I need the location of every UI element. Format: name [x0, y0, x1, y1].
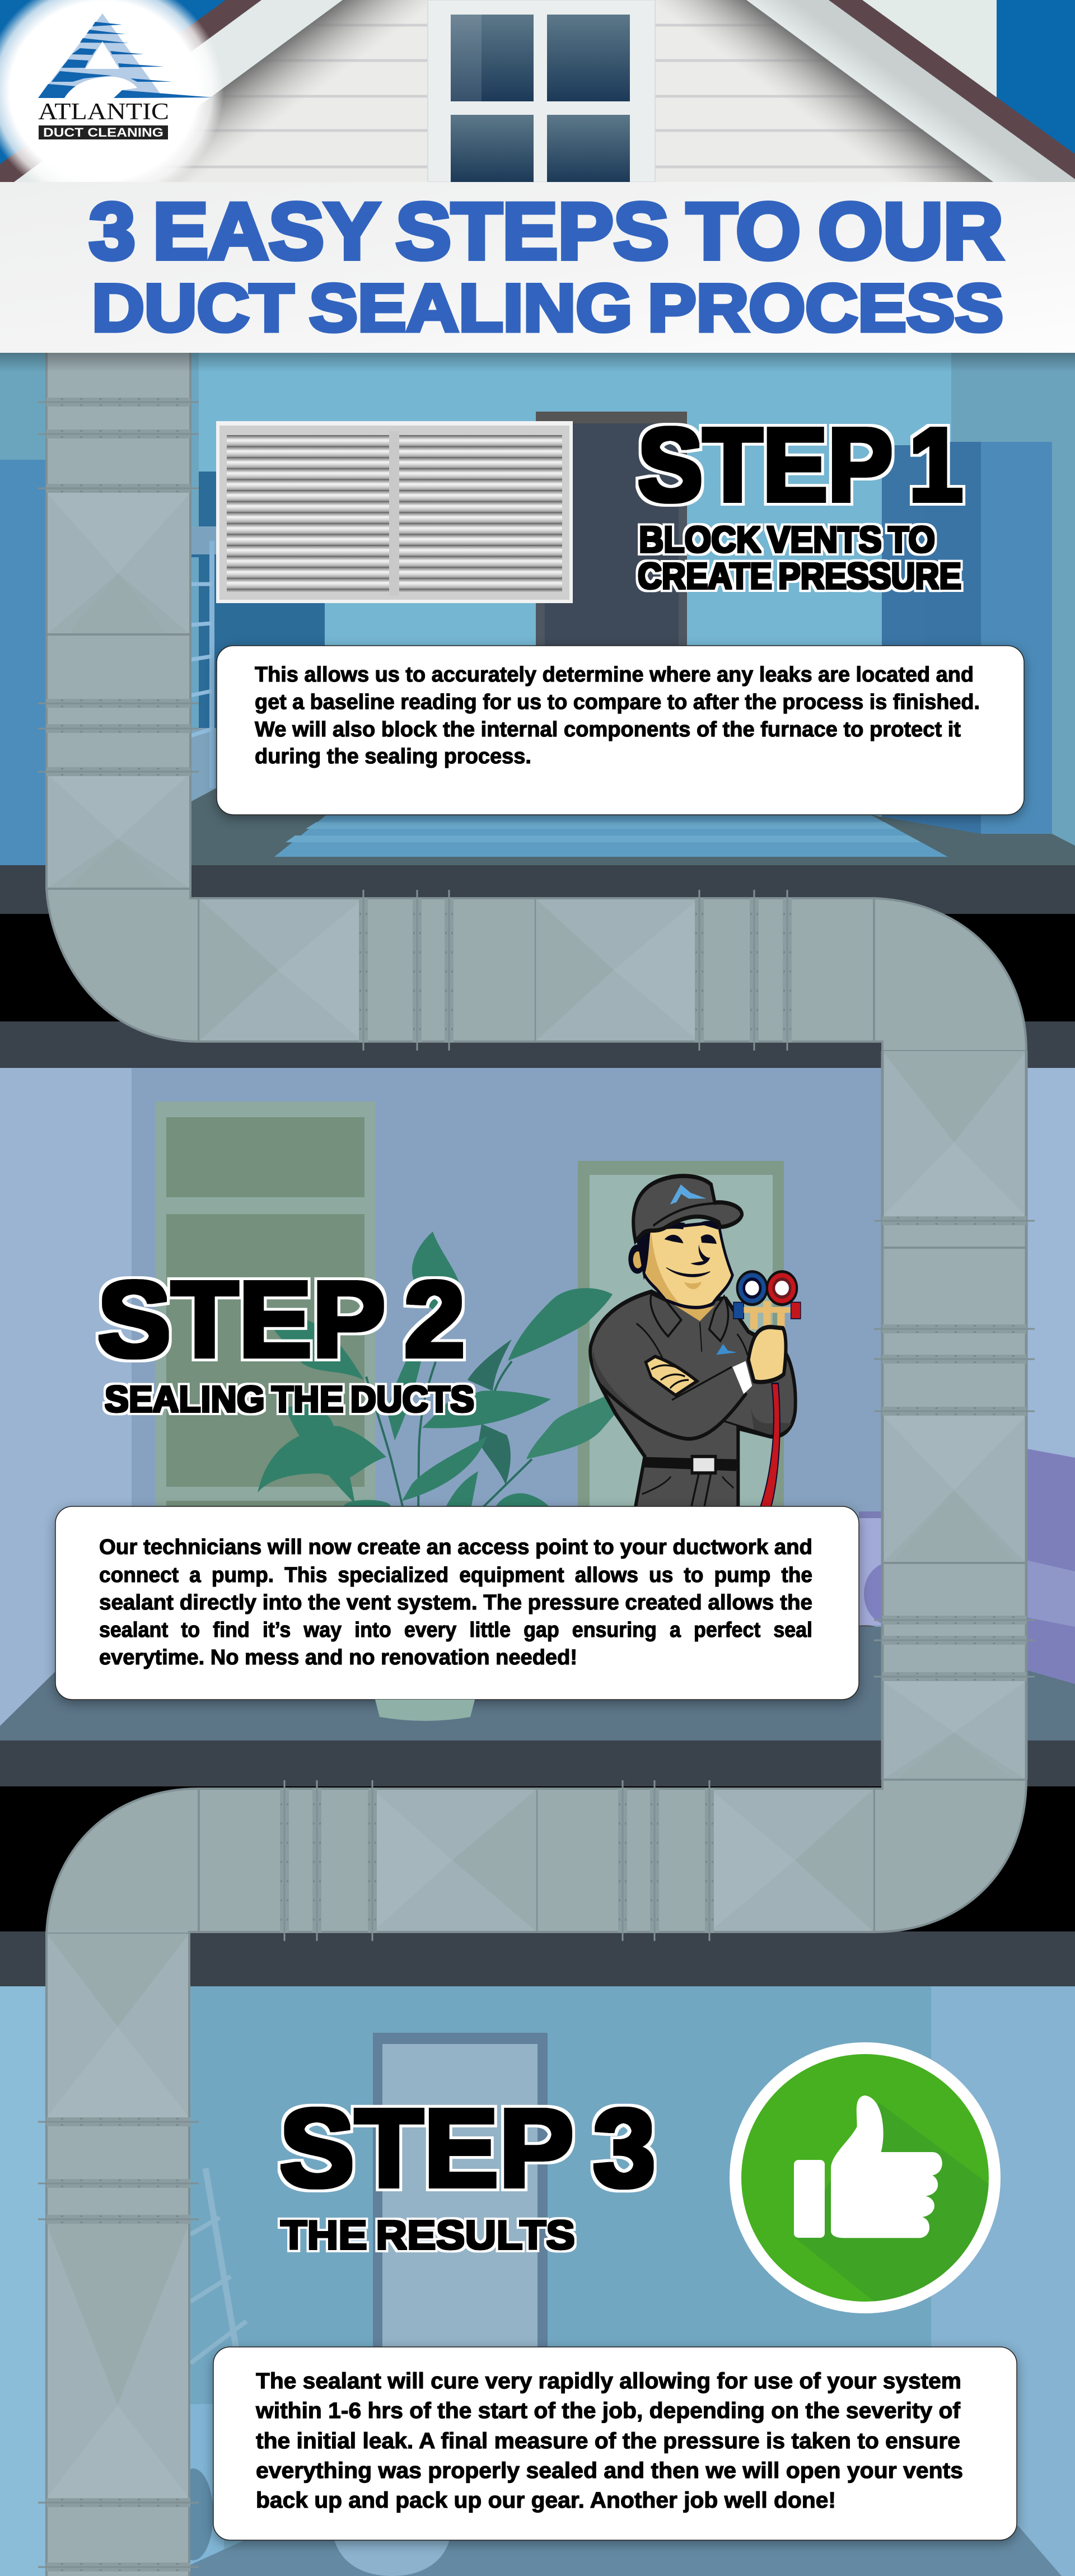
green door — [578, 1161, 784, 1519]
step 1 subheading — [638, 519, 961, 596]
step 2 subheading: SEALING THE DUCTS — [105, 1378, 474, 1420]
step 2 text card — [55, 1506, 859, 1700]
step 1 text card: We will also block the internal components of the furnace to protect it — [255, 718, 961, 741]
attic window — [428, 0, 655, 182]
step 2 text card: everytime. No mess and no renovation needed! — [99, 1646, 577, 1669]
step 3 text card: back up and pack up our gear. Another job well done! — [256, 2488, 836, 2513]
title text — [89, 187, 1003, 346]
step 1 subheading: BLOCK VENTS TO — [639, 519, 935, 560]
step 1 text card: during the sealing process. — [255, 745, 531, 768]
icon: wall vent — [216, 421, 573, 603]
panel: step 2 — [55, 1176, 859, 1721]
section 1 room background — [0, 353, 1075, 865]
step 3 text card — [213, 2347, 1017, 2540]
ceiling and crawlspace band 2 — [0, 1740, 1075, 1986]
duct elbow right — [874, 898, 1026, 1051]
background door — [536, 412, 687, 692]
step 2 text card: connect a pump. This specialized equipment allows us to pump the — [99, 1564, 812, 1587]
ceiling and crawlspace band 1 — [0, 865, 1075, 1068]
blue wardrobe — [882, 442, 1052, 834]
title text: 3 EASY STEPS TO OUR — [89, 187, 1003, 276]
panel: step 3 — [213, 2042, 1017, 2540]
step 2 text card: sealant directly into the vent system. The pressure created allows the — [99, 1591, 812, 1614]
step 2 text card: sealant to find it’s way into every little gap ensuring a perfect seal — [99, 1618, 812, 1642]
green window — [155, 1102, 375, 1518]
duct run 1: vertical — [38, 353, 199, 889]
step 2 heading: STEP 2 — [97, 1259, 465, 1379]
title banner — [0, 182, 1075, 372]
step 1 subheading: CREATE PRESSURE — [638, 555, 961, 596]
panel: step 1 — [216, 407, 1024, 815]
back door — [373, 2033, 548, 2369]
logo: Atlantic Duct Cleaning — [0, 0, 224, 206]
duct elbow lower right — [874, 1780, 1026, 1932]
step 3 text card: everything was properly sealed and then we will open your vents — [256, 2458, 963, 2483]
duct run 1: horizontal — [199, 890, 874, 1051]
step 1 text card: get a baseline reading for us to compare to after the process is finished. — [255, 690, 980, 714]
potted plant — [258, 1231, 616, 1713]
logo: Atlantic Duct Cleaning: ATLANTIC — [38, 99, 169, 125]
title text: DUCT SEALING PROCESS — [92, 270, 1003, 346]
duct run 3: vertical — [38, 1934, 199, 2576]
duct elbow top left — [46, 889, 199, 1042]
duct elbow lower left — [46, 1789, 199, 1934]
step 3 text card: within 1-6 hrs of the start of the job, depending on the severity of — [255, 2398, 961, 2423]
duct run 2: horizontal — [199, 1780, 874, 1941]
duct run 2: vertical — [874, 1051, 1035, 1781]
leaning ladder — [190, 2168, 271, 2554]
step 1 text card — [217, 646, 1024, 815]
step 3 text card: the initial leak. A final measure of the pressure is taken to ensure — [256, 2429, 960, 2453]
step 3 subheading: THE RESULTS — [281, 2213, 575, 2258]
ladder and shelf — [190, 526, 216, 801]
icon: thumbs up — [730, 2042, 1001, 2313]
step 2 text card: Our technicians will now create an access point to your ductwork and — [99, 1536, 812, 1559]
step 1 heading: STEP 1 — [638, 407, 963, 523]
house roof header — [0, 0, 1075, 182]
purple sofa — [850, 1449, 1075, 1684]
step 1 text card: This allows us to accurately determine where any leaks are located and — [255, 663, 974, 687]
logo: Atlantic Duct Cleaning: DUCT CLEANING — [43, 125, 163, 139]
plant pot — [375, 1700, 475, 1721]
floor rug — [274, 815, 948, 857]
section 3 room background — [0, 1986, 1075, 2576]
technician mascot — [590, 1176, 801, 1512]
section 2 room background — [0, 1068, 1075, 1740]
step 3 text card: The sealant will cure very rapidly allowing for use of your system — [256, 2369, 961, 2393]
step 3 heading: STEP 3 — [279, 2086, 656, 2210]
